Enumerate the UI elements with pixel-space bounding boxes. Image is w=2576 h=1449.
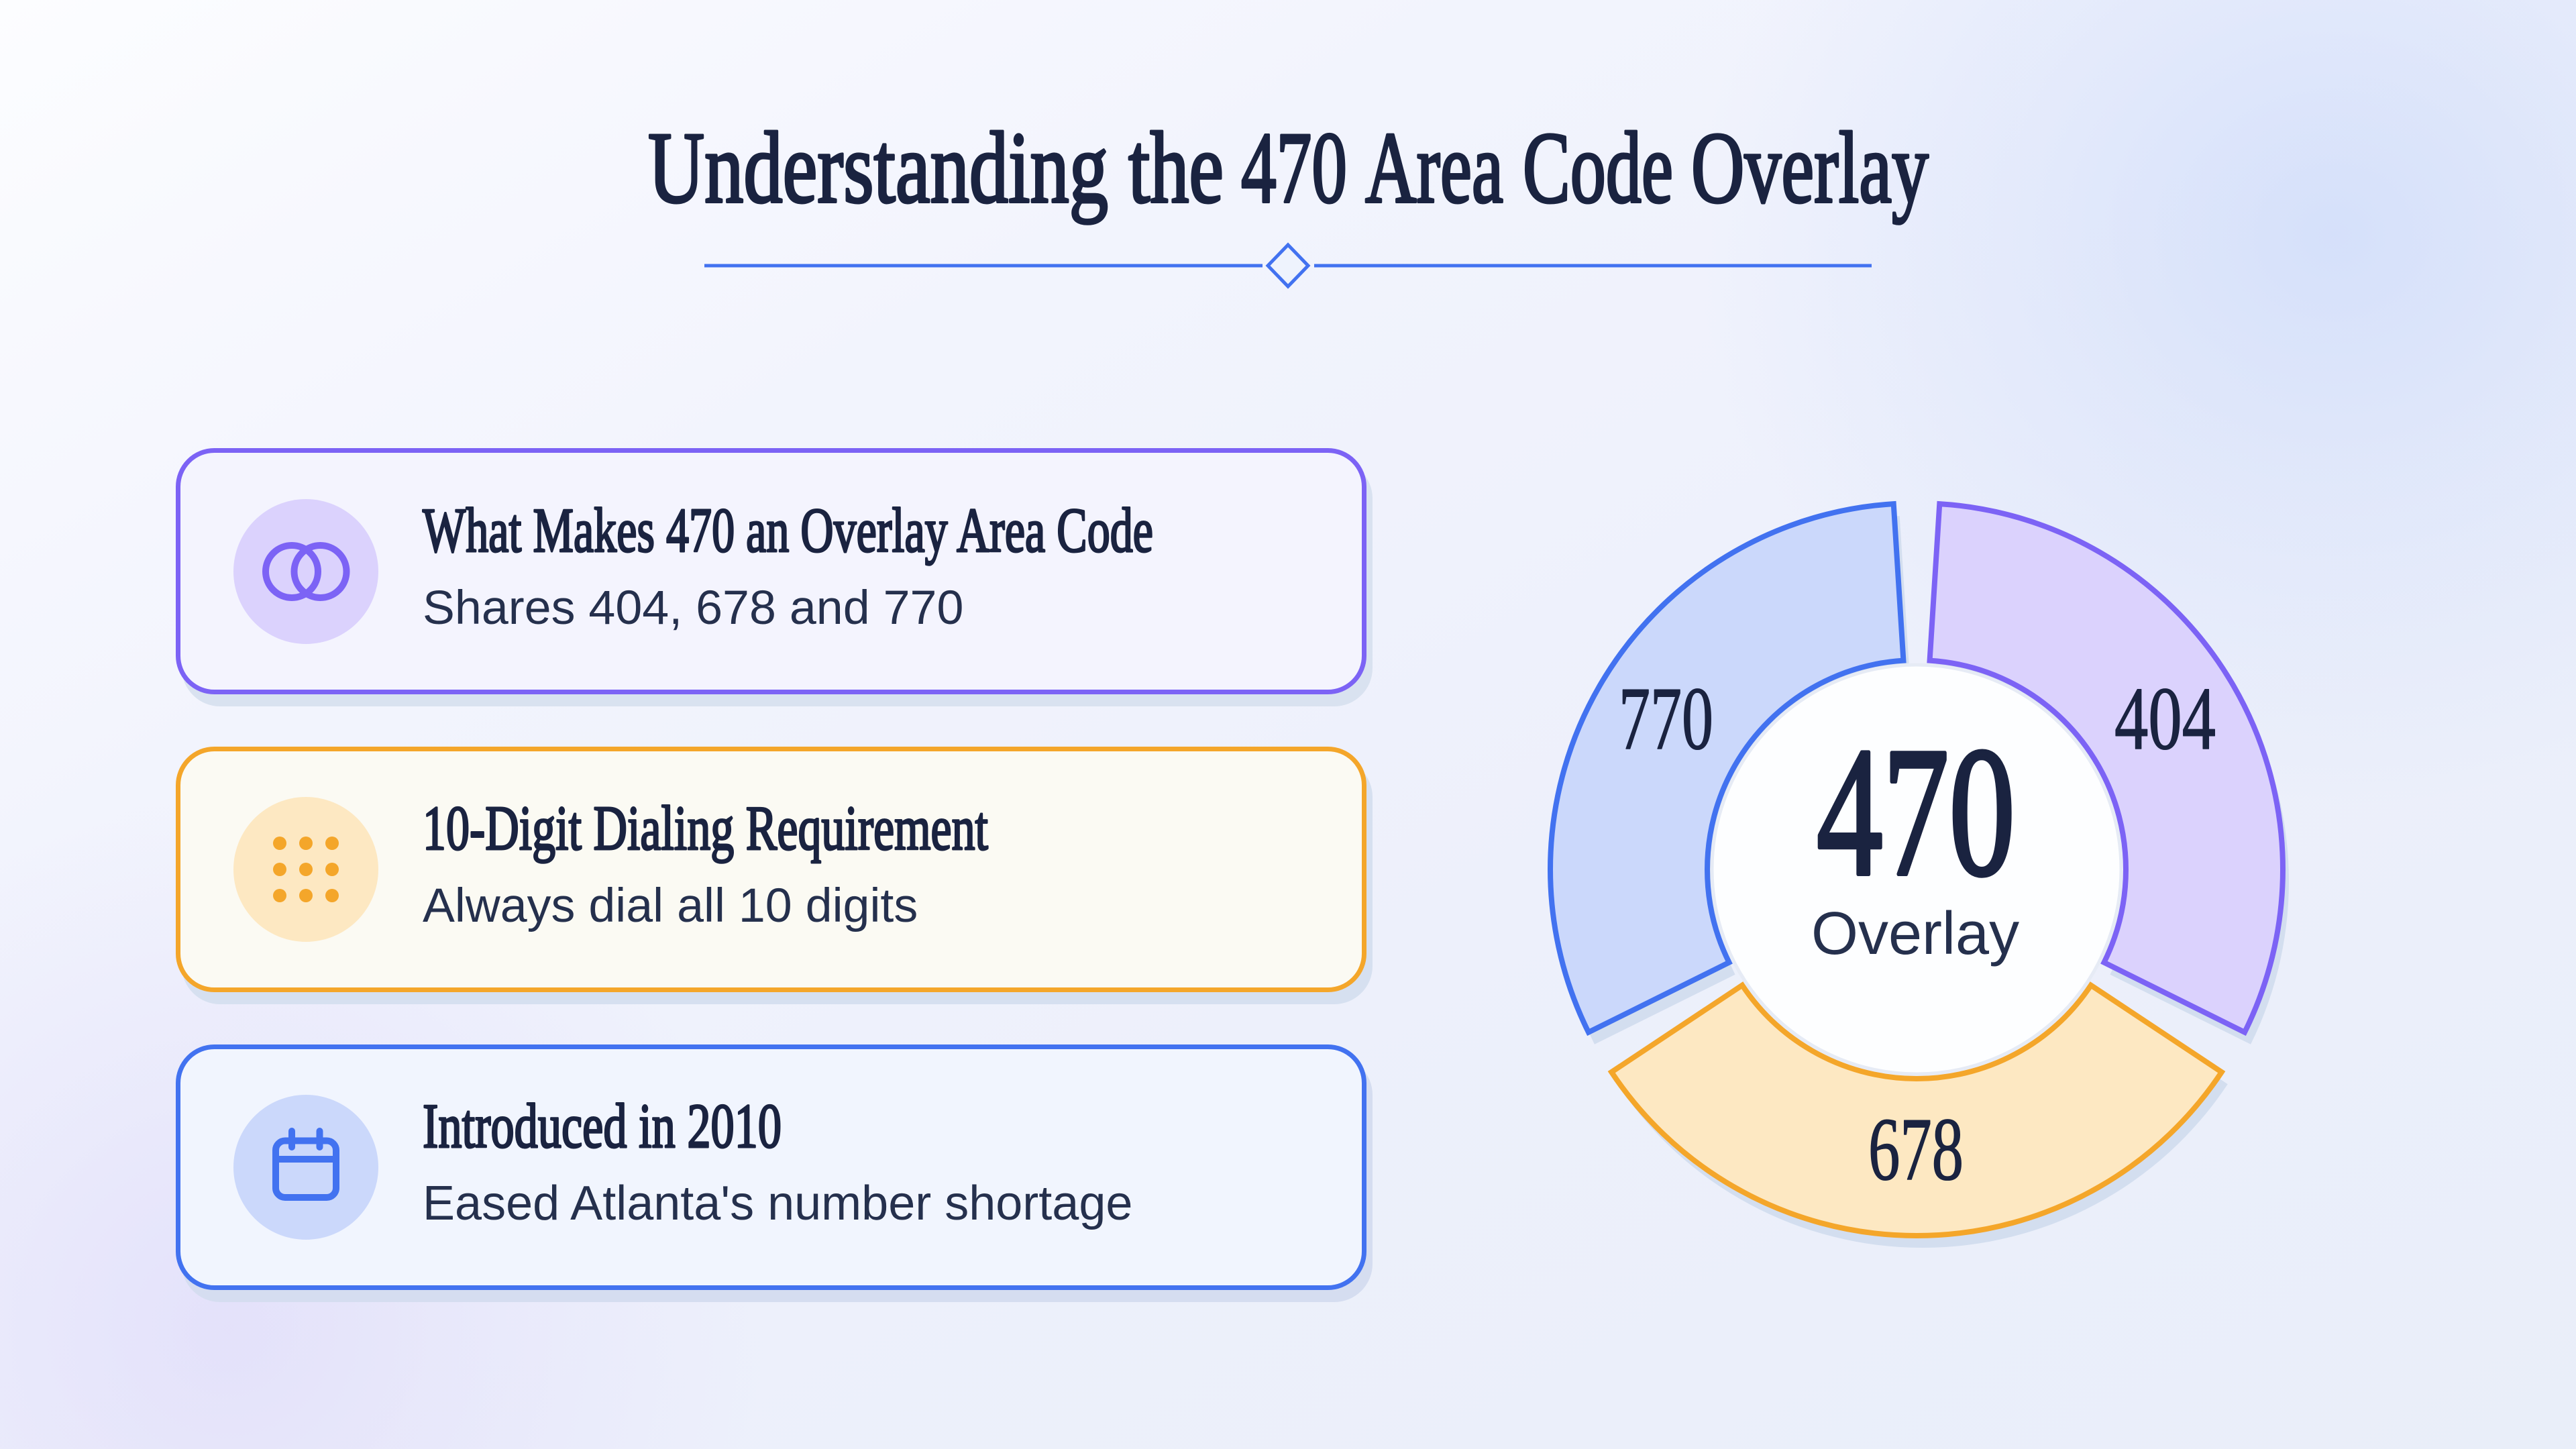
title: the [1128, 111, 1224, 224]
center value: 470 [1817, 709, 2015, 914]
card heading: Introduced in 2010 [423, 1091, 782, 1161]
panel: dialing card [178, 749, 1373, 1004]
panel: overlay explanation card [178, 451, 1373, 706]
label: 770: 770 [1619, 669, 1713, 768]
title: Area [1365, 111, 1503, 224]
icon: keypad dots [233, 797, 378, 942]
segment: 678 [1611, 985, 2222, 1236]
card heading: What Makes 470 an Overlay Area Code [423, 496, 1153, 566]
label: 678: 678 [1868, 1099, 1964, 1199]
center label: Overlay [1811, 900, 2019, 967]
panel: introduction card [178, 1046, 1373, 1302]
card text: Shares 404, 678 and 770 [423, 581, 963, 635]
center circle [1712, 665, 2121, 1074]
icon: calendar [233, 1095, 378, 1240]
segment: 404 [1930, 504, 2283, 1032]
card text: Always dial all 10 digits [423, 879, 918, 932]
card text: Eased Atlanta's number shortage [423, 1177, 1132, 1230]
icon: overlapping rings [233, 499, 378, 644]
donut chart [1550, 504, 2289, 1248]
segment: 770 [1550, 504, 1903, 1032]
title: Overlay [1691, 111, 1929, 224]
segment shadows [1556, 516, 2289, 1248]
title: Understanding [648, 111, 1108, 224]
label: 404: 404 [2114, 669, 2216, 768]
card heading: 10-Digit Dialing Requirement [423, 794, 988, 863]
title divider with diamond [704, 245, 1872, 286]
title [648, 111, 1929, 224]
title: 470 [1241, 111, 1347, 224]
title: Code [1523, 111, 1673, 224]
